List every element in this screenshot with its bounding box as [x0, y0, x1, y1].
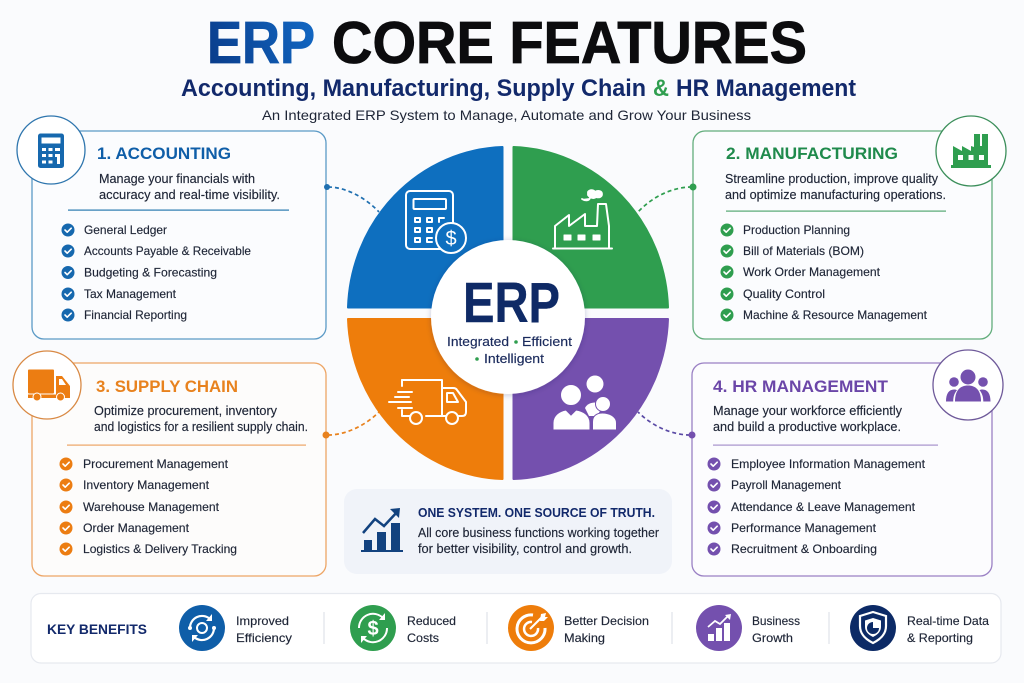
- benefit: business growth: Growth: [752, 631, 793, 645]
- description: and build a productive workplace.: [713, 420, 901, 434]
- feature list: Financial Reporting: [84, 308, 187, 322]
- subtitle: HR Management: [676, 75, 856, 102]
- center tagline: Efficient: [522, 335, 573, 349]
- benefit: business growth: Business: [752, 614, 800, 628]
- icon: calculator with dollar: $: [445, 228, 457, 250]
- heading: 3. SUPPLY CHAIN: [96, 377, 238, 396]
- connector: manufacturing: [638, 184, 696, 212]
- feature list: Payroll Management: [731, 478, 842, 492]
- feature list: Inventory Management: [83, 478, 210, 492]
- connector: hr: [638, 412, 696, 438]
- segment: hr management: [514, 319, 668, 479]
- callout: one system: [344, 489, 672, 574]
- benefit: reduced costs: Reduced: [407, 614, 456, 628]
- center tagline: Intelligent: [484, 352, 545, 366]
- center tagline: [447, 335, 573, 366]
- center circle: [431, 240, 585, 394]
- icon: delivery truck: [389, 380, 466, 424]
- panel: accounting: [17, 116, 326, 339]
- benefit: better decision making: Making: [564, 631, 605, 645]
- benefit: improved efficiency: Improved: [236, 614, 289, 628]
- benefit: business growth: [696, 605, 800, 651]
- heading: 1. ACCOUNTING: [97, 144, 231, 163]
- connector: supply chain: [322, 412, 379, 438]
- benefit: reduced costs: Costs: [407, 631, 439, 645]
- donut chart: [348, 147, 668, 479]
- benefit: real-time data and reporting: [850, 605, 989, 651]
- feature list: Machine & Resource Management: [743, 308, 928, 322]
- description: [99, 172, 280, 202]
- icon: factory badge: [936, 116, 1006, 186]
- feature list: Order Management: [83, 521, 190, 535]
- feature list: Budgeting & Forecasting: [84, 266, 217, 280]
- benefit: better decision making: Better Decision: [564, 614, 649, 628]
- feature list: [62, 223, 251, 322]
- feature list: Bill of Materials (BOM): [743, 244, 864, 258]
- panel: manufacturing: [693, 116, 1006, 339]
- tagline: An Integrated ERP System to Manage, Automate and Grow Your Business: [262, 107, 751, 123]
- benefit: improved efficiency: Efficiency: [236, 631, 292, 645]
- feature list: [720, 223, 928, 322]
- feature list: Performance Management: [731, 521, 877, 535]
- feature list: Quality Control: [743, 287, 825, 301]
- heading: ONE SYSTEM. ONE SOURCE OF TRUTH.: [418, 505, 655, 520]
- feature list: General Ledger: [84, 223, 167, 237]
- description: and logistics for a resilient supply chain.: [94, 420, 308, 434]
- heading: 4. HR MANAGEMENT: [713, 377, 889, 396]
- description: [725, 172, 946, 202]
- benefit: real-time data and reporting: & Reporting: [907, 631, 973, 645]
- feature list: Logistics & Delivery Tracking: [83, 542, 237, 556]
- benefit: real-time data and reporting: Real-time Data: [907, 614, 989, 628]
- benefit: reduced costs: $: [367, 618, 379, 640]
- subtitle: Accounting, Manufacturing, Supply Chain: [181, 75, 646, 102]
- segment: supply chain: [348, 319, 502, 479]
- text: All core business functions working together: [418, 526, 659, 540]
- description: [713, 404, 903, 434]
- feature list: [708, 457, 926, 556]
- feature list: Accounts Payable & Receivable: [84, 244, 251, 258]
- feature list: Employee Information Management: [731, 457, 926, 471]
- description: Streamline production, improve quality: [725, 172, 939, 186]
- icon: calculator with dollar: [406, 191, 466, 253]
- description: accuracy and real-time visibility.: [99, 188, 280, 202]
- icon: people: [553, 376, 616, 430]
- feature list: Attendance & Leave Management: [731, 500, 916, 514]
- description: Optimize procurement, inventory: [94, 404, 278, 418]
- subtitle: &: [653, 75, 669, 102]
- benefit: better decision making: [508, 605, 649, 651]
- benefit: reduced costs: [350, 605, 456, 651]
- description: Manage your workforce efficiently: [713, 404, 903, 418]
- benefit: improved efficiency: [179, 605, 292, 651]
- feature list: Warehouse Management: [83, 500, 220, 514]
- feature list: Procurement Management: [83, 457, 229, 471]
- segment: accounting: [348, 147, 502, 308]
- icon: people badge: [933, 350, 1003, 420]
- feature list: Work Order Management: [743, 265, 881, 279]
- title: CORE FEATURES: [332, 10, 807, 76]
- text: for better visibility, control and growth.: [418, 542, 632, 556]
- panel: hr management: [692, 350, 1003, 576]
- icon: factory outline: [553, 190, 612, 248]
- title: ERP: [207, 10, 315, 76]
- text: [418, 526, 659, 556]
- heading: KEY BENEFITS: [47, 621, 147, 637]
- segment: manufacturing: [514, 147, 668, 308]
- connector: accounting: [324, 184, 379, 212]
- feature list: Production Planning: [743, 223, 850, 237]
- description: and optimize manufacturing operations.: [725, 188, 946, 202]
- icon: growth chart: [361, 508, 403, 552]
- feature list: Tax Management: [84, 287, 177, 301]
- feature list: [60, 457, 237, 556]
- center tagline: Integrated: [447, 335, 509, 349]
- description: Manage your financials with: [99, 172, 255, 186]
- key benefits bar: [31, 594, 1001, 663]
- icon: calculator badge: [17, 116, 85, 184]
- icon: truck badge: [13, 351, 81, 419]
- feature list: Recruitment & Onboarding: [731, 542, 877, 556]
- heading: 2. MANUFACTURING: [726, 144, 898, 163]
- description: [94, 404, 308, 434]
- panel: supply chain: [13, 351, 326, 576]
- center label: ERP: [463, 271, 560, 335]
